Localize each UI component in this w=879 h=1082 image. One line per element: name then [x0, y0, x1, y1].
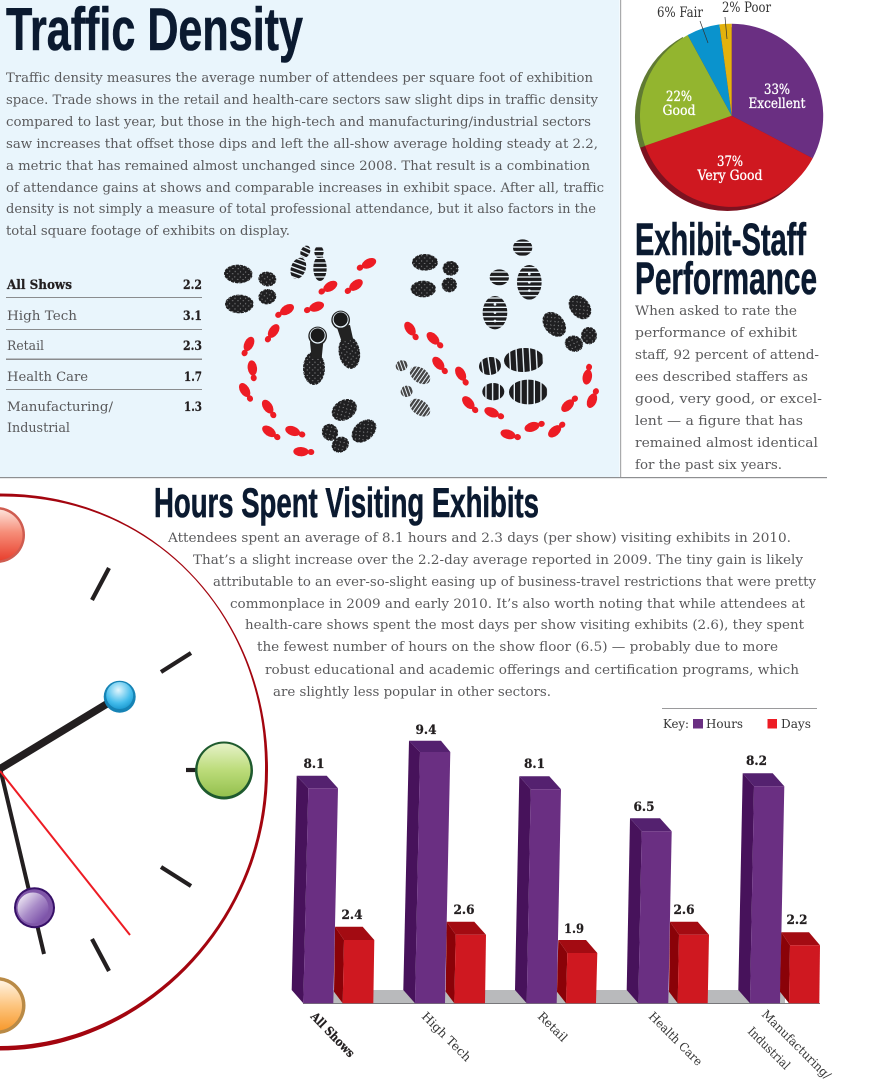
table: traffic density by sector: 2.2: [183, 278, 202, 293]
icon: red footprint trail left: [237, 256, 378, 457]
bars: Health Care: 6.5: [634, 800, 654, 815]
slice: 37% Very Good: [645, 116, 813, 207]
icon: studded prints top right: [483, 239, 542, 329]
icon: red footprint trail right: [402, 320, 601, 442]
bars: All Shows: [292, 757, 374, 1003]
knob: purple: [14, 887, 55, 928]
knob: green: [195, 742, 253, 800]
pie labels: Excellent: [748, 96, 806, 112]
chart: exhibit staff pie: [635, 0, 823, 211]
bars: High Tech: 2.6: [454, 903, 474, 918]
pie labels: Very Good: [697, 168, 763, 184]
text block: traffic density description: Traffic density measures the average number of attendees per square foot of exhibition: [6, 71, 593, 86]
table: traffic density by sector: 1.7: [184, 370, 202, 385]
icon: boot prints bottom: [319, 395, 381, 456]
text block: traffic density description: total square footage of exhibits on display.: [6, 224, 290, 239]
panel: traffic density background: [0, 0, 620, 477]
text block: hours description: That’s a slight increase over the 2.2-day average reported in 2009. The tiny gain is likely: [193, 553, 803, 568]
chart: hours and days bars: [292, 723, 834, 1082]
text block: traffic density description: [6, 71, 604, 239]
table: traffic density by sector: 3.1: [183, 309, 202, 324]
text block: traffic density description: saw increases that offset those dips and left the all-show average holding steady at 2.2,: [6, 137, 598, 152]
axis labels: Health Care: [646, 1009, 705, 1069]
icon: boot prints right: [538, 291, 597, 354]
icon: running shoe prints: [303, 311, 363, 385]
axis labels: Retail: [535, 1009, 570, 1045]
pie labels: 2% Poor: [722, 0, 771, 16]
panel divider vertical: [620, 0, 621, 477]
illustration: footprints: [224, 239, 601, 457]
bars: Health Care: [627, 800, 709, 1003]
text block: exhibit staff description: [635, 304, 822, 473]
text block: hours description: attributable to an ever-so-slight easing up of business-travel restrictions that were pretty: [213, 575, 816, 590]
text block: hours description: robust educational and academic offerings and certification programs, which: [265, 663, 799, 678]
knob: orange: [0, 977, 26, 1034]
heading: Hours Spent Visiting Exhibits: Hours Spent Visiting Exhibits: [154, 479, 539, 526]
text block: traffic density description: space. Trade shows in the retail and health-care sectors saw slight dips in traffic density: [6, 93, 598, 108]
text block: exhibit staff description: good, very good, or excel-: [635, 392, 822, 407]
clock tick marks: [92, 568, 198, 971]
pie labels: 37%: [717, 154, 743, 170]
axis labels: Industrial: [745, 1024, 793, 1072]
text block: traffic density description: a metric that has remained almost unchanged since 2008. That result is a combination: [6, 159, 590, 174]
table: traffic density by sector: All Shows: [6, 278, 72, 293]
slice: 2% Poor: [719, 24, 732, 116]
icon: large striped shoe prints: [478, 347, 548, 404]
icon: grey sneaker prints: [394, 359, 433, 420]
axis labels: All Shows: [307, 1009, 358, 1060]
text block: hours description: health-care shows spent the most days per show visiting exhibits (2.6), they spent: [245, 618, 805, 633]
legend: key: Key:: [663, 716, 689, 731]
legend: key: Hours: [706, 716, 743, 731]
text block: exhibit staff description: performance of exhibit: [635, 326, 798, 341]
bars: High Tech: [403, 723, 486, 1003]
table: traffic density by sector: Manufacturing/: [7, 400, 113, 415]
bars: All Shows: 2.4: [342, 908, 362, 923]
text block: hours description: are slightly less popular in other sectors.: [273, 685, 551, 700]
section divider horizontal: [0, 477, 827, 478]
icon: striped shoe prints top: [288, 244, 327, 281]
table: traffic density by sector: [6, 278, 202, 436]
clock hands: [0, 702, 130, 954]
legend: key: Days: [781, 716, 811, 731]
bars: Retail: [515, 757, 597, 1003]
heading: Exhibit-Staff Performance: [635, 214, 817, 304]
slice: 22% Good: [640, 35, 732, 146]
text block: exhibit staff description: When asked to rate the: [635, 304, 797, 319]
knob: blue: [104, 681, 136, 713]
text block: traffic density description: compared to last year, but those in the high-tech and manufacturing/industrial sectors: [6, 115, 591, 130]
axis labels: High Tech: [419, 1009, 474, 1065]
table: traffic density by sector: Industrial: [7, 421, 70, 436]
table: traffic density by sector: 2.3: [183, 339, 202, 354]
table: traffic density by sector: 1.3: [184, 400, 202, 415]
pie labels: 22%: [666, 89, 692, 105]
slice: 33% Excellent: [732, 24, 823, 158]
text block: hours description: the fewest number of hours on the show floor (6.5) — probably due to more: [257, 640, 778, 655]
illustration: clock: [0, 494, 268, 1050]
bars: Manufacturing/Industrial: 2.2: [786, 913, 808, 928]
knob: red: [0, 507, 25, 563]
text block: traffic density description: of attendance gains at shows and comparable increases in exhibit space. After all, traffic: [6, 181, 604, 196]
axis labels: [307, 1007, 834, 1082]
table: traffic density by sector: Retail: [7, 339, 44, 354]
text block: traffic density description: density is not simply a measure of total professional attendance, but it also factors in the: [6, 202, 596, 217]
text block: exhibit staff description: staff, 92 percent of attend-: [635, 348, 819, 363]
pie labels: [657, 0, 806, 184]
axis labels: Manufacturing/: [759, 1007, 834, 1082]
text block: exhibit staff description: for the past six years.: [635, 458, 782, 473]
legend: key: [662, 708, 817, 731]
pie labels: Good: [662, 103, 696, 119]
text block: exhibit staff description: ees described staffers as: [635, 370, 808, 385]
bars: Retail: 1.9: [564, 922, 584, 937]
icon: boot prints upper right: [411, 254, 459, 297]
bars: Retail: 8.1: [524, 757, 545, 772]
slice: 6% Fair: [688, 24, 732, 116]
bars: Manufacturing/Industrial: [738, 754, 820, 1003]
clock rim: [0, 494, 268, 1050]
bars: All Shows: 8.1: [304, 757, 324, 772]
text block: hours description: Attendees spent an average of 8.1 hours and 2.3 days (per show) visiting exhibits in 2010.: [167, 531, 791, 546]
pie labels: 6% Fair: [657, 5, 703, 21]
chart floor: [303, 990, 820, 1004]
bars: Health Care: 2.6: [674, 903, 694, 918]
text block: exhibit staff description: lent — a figure that has: [635, 414, 803, 429]
table: traffic density by sector: High Tech: [7, 309, 77, 324]
table: traffic density by sector: Health Care: [7, 370, 88, 385]
text block: hours description: commonplace in 2009 and early 2010. It’s also worth noting that while attendees at: [230, 597, 806, 612]
bars: High Tech: 9.4: [416, 723, 436, 738]
text block: exhibit staff description: remained almost identical: [635, 436, 818, 451]
pie shadow: [636, 27, 820, 211]
pie labels: 33%: [764, 82, 790, 98]
bars: Manufacturing/Industrial: 8.2: [746, 754, 767, 769]
icon: boot prints top left: [224, 264, 278, 313]
text block: hours description: [167, 531, 816, 700]
